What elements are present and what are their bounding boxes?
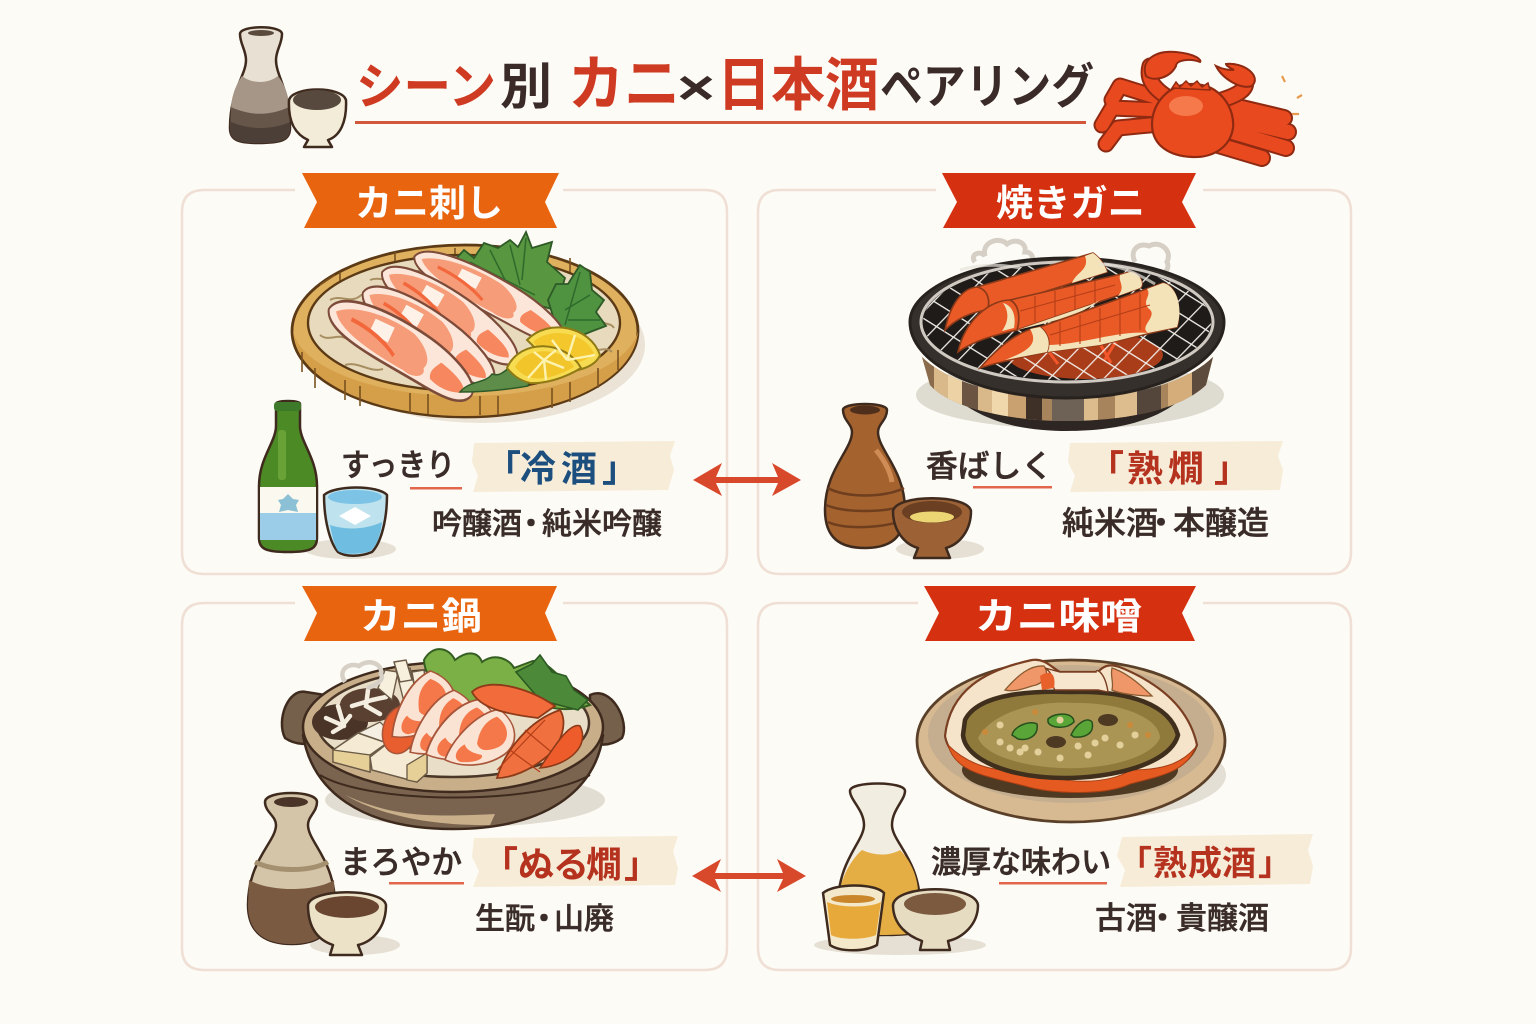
- sake types: 古酒・貴醸酒: 古酒: [1095, 901, 1157, 936]
- illustration: brown flask and bowl: [825, 404, 984, 559]
- sake types: 生酛・山廃: ・: [529, 903, 559, 936]
- header: [230, 27, 1302, 158]
- icon: red crab: [1102, 52, 1302, 158]
- sake types: 古酒・貴醸酒: ・: [1147, 901, 1178, 936]
- sake types: 純米酒・本醸造: 純米酒: [1062, 505, 1158, 541]
- label: すっきり: すっきり: [341, 448, 455, 483]
- title: 別: [500, 59, 552, 115]
- ribbon: 焼きガニ: [942, 173, 1196, 228]
- sake types: 古酒・貴醸酒: 貴醸酒: [1176, 901, 1269, 936]
- illustration: ceramic flask and cup: [248, 793, 400, 955]
- icon: sake flask and cup: [230, 27, 346, 147]
- illustration: crab sashimi on bamboo tray: [292, 232, 645, 423]
- title: カニ: [568, 51, 680, 118]
- title: [356, 51, 1094, 118]
- panel: カニ味噌: [758, 586, 1351, 970]
- arrow: top double-headed: [693, 463, 801, 496]
- highlight: 「熟成酒」: 「熟成酒」: [1118, 845, 1292, 883]
- highlight: 「ぬる燗」: [472, 836, 678, 887]
- sake types: 純米酒・本醸造: ・: [1145, 505, 1177, 541]
- label: 濃厚な味わい: 濃厚な味わい: [931, 845, 1111, 880]
- highlight: 「冷酒」: [472, 441, 675, 492]
- illustration: glass carafe, glass and bowl: [814, 784, 986, 955]
- ribbon: カニ刺し: カニ刺し: [355, 183, 503, 224]
- arrow: bottom double-headed: [692, 859, 806, 892]
- title: ×: [677, 62, 715, 115]
- label: 香ばしく: 香ばしく: [926, 449, 1053, 484]
- title: ペアリング: [880, 61, 1094, 114]
- ribbon: 焼きガニ: 焼きガニ: [996, 183, 1145, 224]
- ribbon: カニ鍋: カニ鍋: [360, 596, 482, 637]
- title: 日本酒: [717, 53, 879, 118]
- illustration: crab hotpot: [282, 649, 624, 829]
- ribbon: カニ味噌: カニ味噌: [975, 596, 1142, 637]
- title: シーン: [356, 59, 496, 115]
- sake types: 吟醸酒・純米吟醸: 純米吟醸: [542, 508, 662, 541]
- highlight: 「熟燗」: 「熟燗」: [1088, 448, 1250, 489]
- highlight: 「熟燗」: [1068, 441, 1283, 492]
- highlight: 「熟成酒」: [1117, 834, 1313, 887]
- label: まろやか: まろやか: [340, 844, 462, 880]
- illustration: green sake bottle and blue cup: [259, 401, 396, 559]
- panel: カニ刺し: [182, 173, 727, 574]
- sake types: 生酛・山廃: 山廃: [554, 903, 614, 936]
- sake types: 吟醸酒・純米吟醸: ・: [516, 508, 546, 541]
- sake types: 純米酒・本醸造: 本醸造: [1173, 505, 1269, 541]
- crab leg 1: [945, 253, 1107, 330]
- sake types: 吟醸酒・純米吟醸: 吟醸酒: [432, 508, 522, 541]
- crab leg 3: [980, 283, 1179, 368]
- ribbon: カニ刺し: [302, 173, 559, 228]
- ribbon: カニ味噌: [924, 586, 1196, 641]
- sake types: 生酛・山廃: 生酛: [475, 903, 535, 936]
- illustration: crab legs on charcoal grill: [910, 240, 1224, 431]
- illustration: crab miso in shell on plate: [917, 660, 1226, 822]
- highlight: 「ぬる燗」: 「ぬる燗」: [482, 844, 660, 885]
- crab leg 2: [958, 272, 1142, 352]
- ribbon: カニ鍋: [302, 586, 557, 641]
- highlight: 「冷酒」: 「冷酒」: [485, 448, 638, 489]
- panel: 焼きガニ: [758, 173, 1351, 574]
- panel: カニ鍋: [182, 586, 727, 970]
